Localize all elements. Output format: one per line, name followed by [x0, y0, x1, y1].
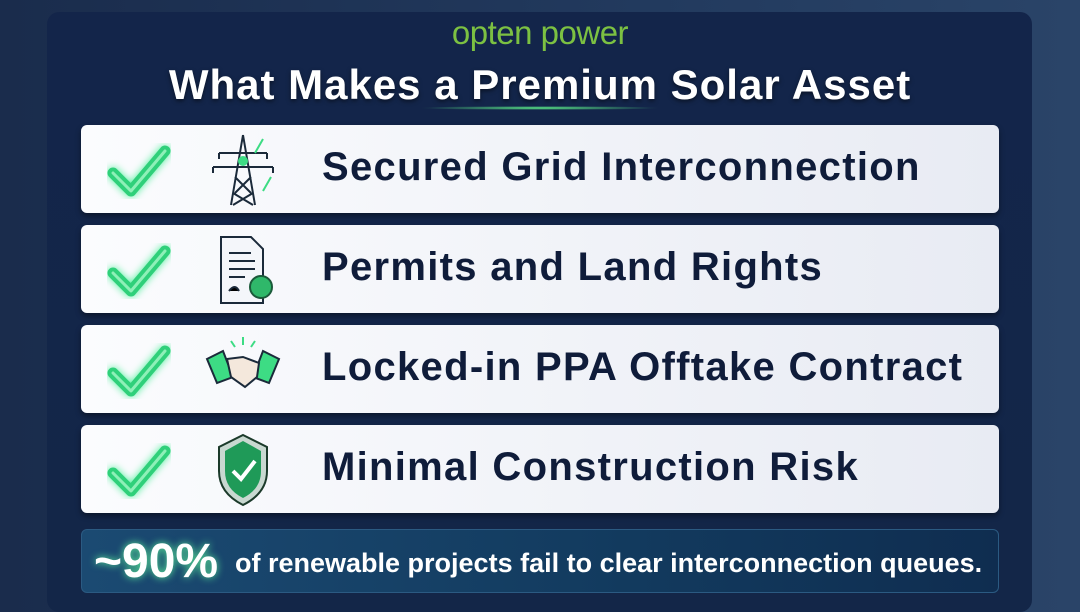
title: What Makes a Premium Solar Asset	[169, 61, 911, 108]
icon: check	[107, 443, 171, 499]
icon: handshake	[206, 337, 280, 388]
logo: opten power	[452, 14, 628, 51]
icon: check	[107, 143, 171, 199]
icon: transmission tower	[212, 134, 274, 206]
label: Locked-in PPA Offtake Contract	[322, 345, 963, 389]
card: construction risk	[81, 425, 999, 513]
icon: check	[107, 243, 171, 299]
card: permits	[81, 225, 999, 313]
icon: shield	[218, 434, 268, 506]
card: grid interconnection	[81, 125, 999, 213]
stat: ~90%	[94, 535, 218, 588]
icon: document	[220, 236, 273, 304]
label: Permits and Land Rights	[322, 245, 823, 289]
card: PPA	[81, 325, 999, 413]
callout banner	[81, 529, 999, 593]
label: Secured Grid Interconnection	[322, 145, 921, 189]
icon: check	[107, 343, 171, 399]
label: Minimal Construction Risk	[322, 445, 859, 489]
stat text: of renewable projects fail to clear interconnection queues.	[235, 548, 982, 578]
